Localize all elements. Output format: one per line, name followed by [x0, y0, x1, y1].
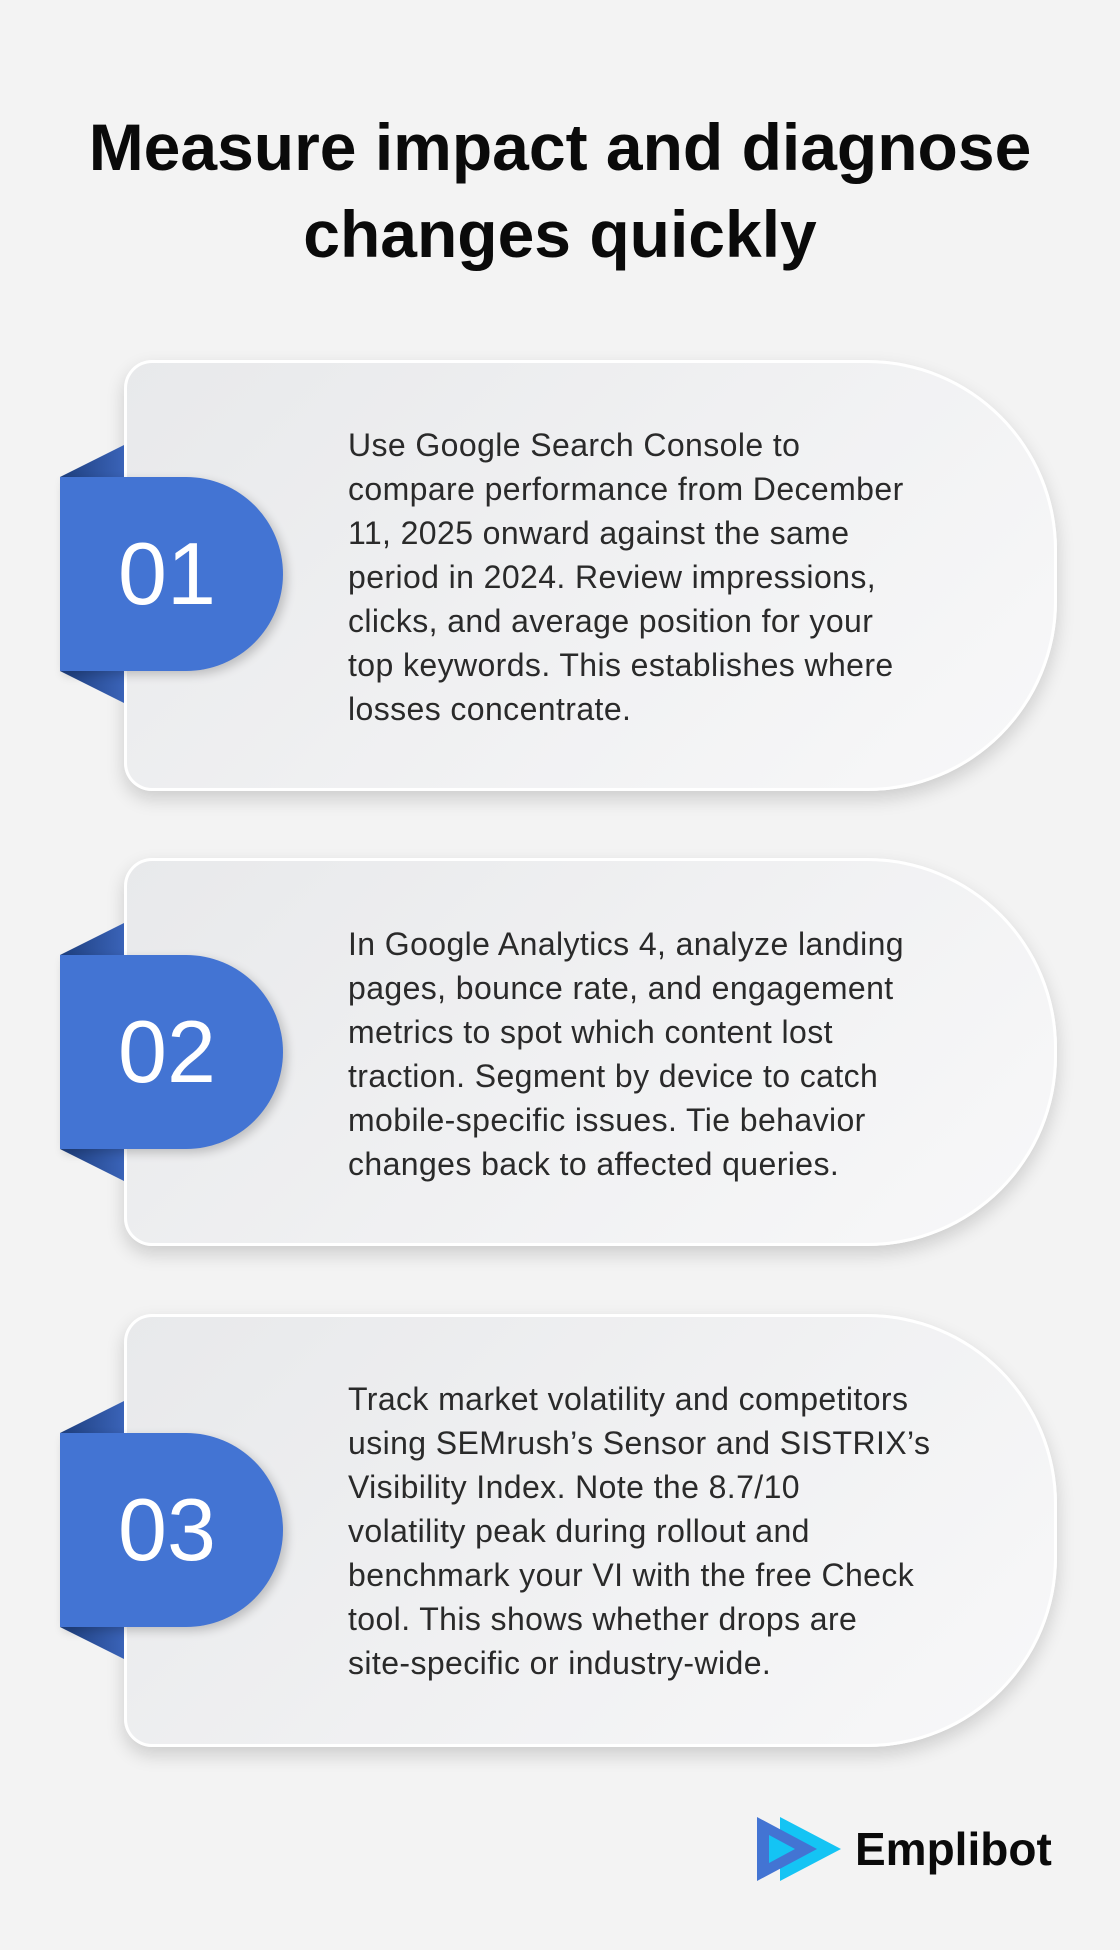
- title: Measure impact and diagnose: [89, 110, 1031, 184]
- text: 01: [118, 524, 216, 623]
- text: Use Google Search Console to: [348, 427, 800, 463]
- text: clicks, and average position for your: [348, 603, 873, 639]
- panel: step 3: [60, 1314, 1064, 1762]
- text: In Google Analytics 4, analyze landing: [348, 926, 904, 962]
- text: pages, bounce rate, and engagement: [348, 970, 894, 1006]
- panel: step 1: [60, 360, 1064, 806]
- text: Track market volatility and competitors: [348, 1381, 908, 1417]
- text: top keywords. This establishes where: [348, 647, 894, 683]
- text: using SEMrush’s Sensor and SISTRIX’s: [348, 1425, 930, 1461]
- logo: Emplibot: [855, 1823, 1052, 1875]
- text: volatility peak during rollout and: [348, 1513, 810, 1549]
- text: period in 2024. Review impressions,: [348, 559, 876, 595]
- panel: step 2: [60, 858, 1064, 1261]
- text: 03: [118, 1480, 216, 1579]
- title: [89, 110, 1031, 271]
- text: 11, 2025 onward against the same: [348, 515, 849, 551]
- text: benchmark your VI with the free Check: [348, 1557, 914, 1593]
- text: mobile-specific issues. Tie behavior: [348, 1102, 866, 1138]
- title: changes quickly: [303, 197, 817, 271]
- text: site-specific or industry-wide.: [348, 1645, 771, 1681]
- text: compare performance from December: [348, 471, 904, 507]
- text: 02: [118, 1002, 216, 1101]
- logo: [757, 1817, 1052, 1881]
- text: changes back to affected queries.: [348, 1146, 839, 1182]
- text: metrics to spot which content lost: [348, 1014, 833, 1050]
- text: traction. Segment by device to catch: [348, 1058, 878, 1094]
- text: Visibility Index. Note the 8.7/10: [348, 1469, 800, 1505]
- text: losses concentrate.: [348, 691, 631, 727]
- text: tool. This shows whether drops are: [348, 1601, 857, 1637]
